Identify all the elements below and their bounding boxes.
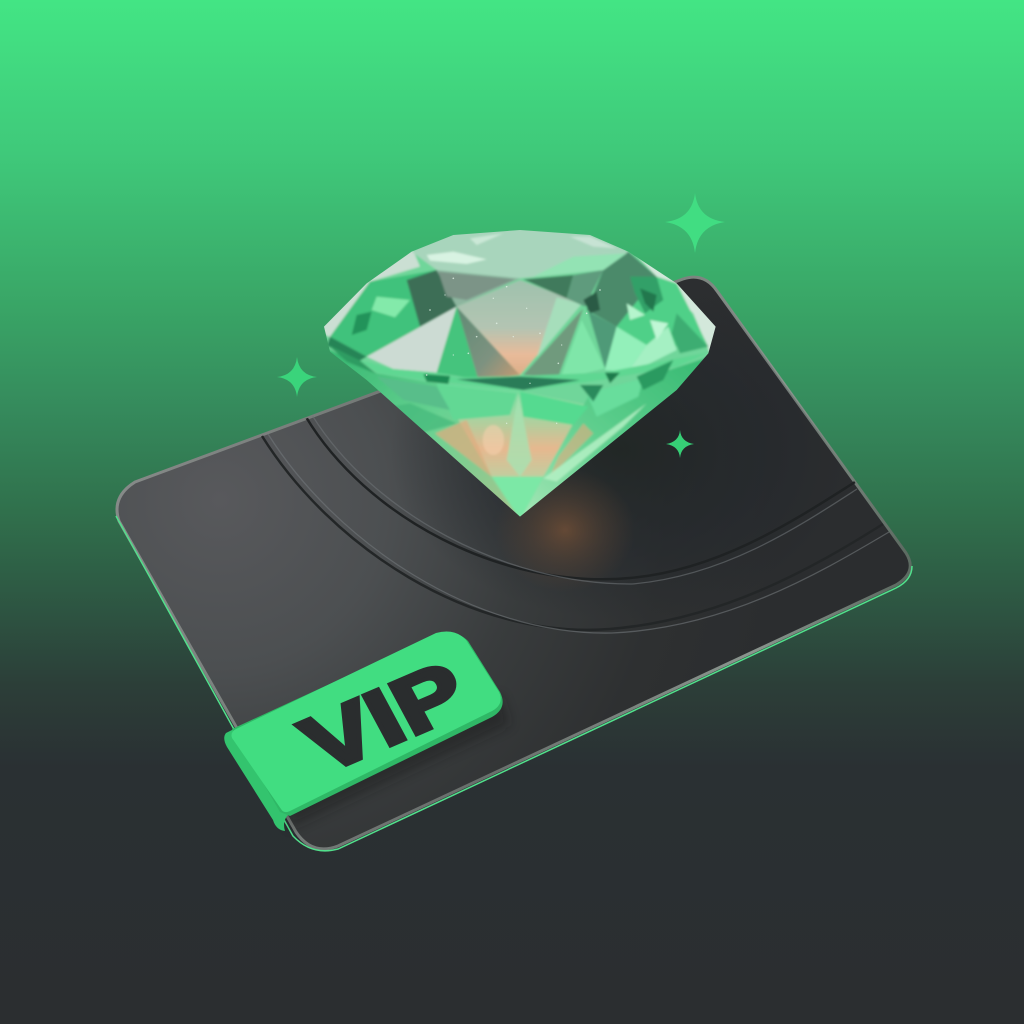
diamond base [326, 248, 710, 406]
girdle band [362, 354, 702, 389]
outer groove [262, 434, 889, 633]
warm glow below gem [510, 479, 622, 579]
VIP label: VIP [287, 644, 482, 791]
tag shadow [285, 695, 510, 828]
sparkle: large [665, 193, 725, 253]
sparkle: left [277, 357, 317, 397]
tag fold [224, 726, 288, 831]
tag edge [232, 633, 503, 816]
inner groove [306, 415, 857, 584]
card face [117, 277, 910, 849]
crown [317, 227, 720, 391]
card [116, 277, 912, 851]
diamond [324, 230, 716, 516]
pavilion [330, 348, 704, 516]
glitter specks [426, 277, 601, 424]
sparkle: small right [666, 430, 694, 458]
tag face [232, 632, 501, 812]
card surface shading and grooves [261, 317, 889, 634]
VIP tag [224, 632, 510, 831]
gem shadow [435, 317, 832, 546]
card green rim [116, 516, 912, 851]
